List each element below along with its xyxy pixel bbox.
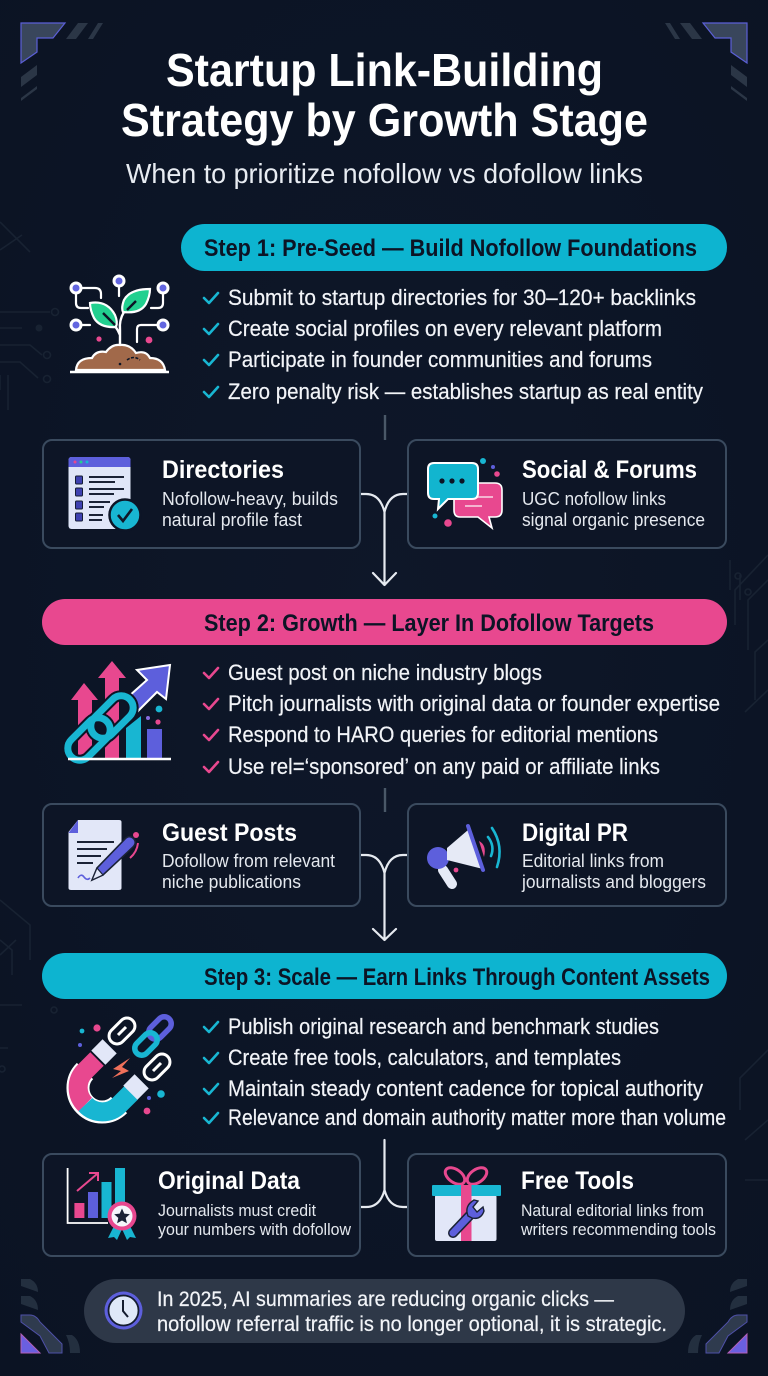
step 1 heading bar <box>181 224 727 271</box>
title: Strategy by Growth Stage <box>121 94 648 146</box>
step 1 checklist: Zero penalty risk — establishes startup as real entity <box>228 379 703 404</box>
card: social and forums <box>408 440 726 548</box>
step 2 checklist <box>204 660 720 779</box>
card: free tools: writers recommending tools <box>520 1220 716 1239</box>
card: original data: Original Data <box>158 1167 301 1195</box>
card: social and forums: signal organic presence <box>522 509 705 530</box>
corner ornament: top left <box>21 23 103 101</box>
icon: magnet attracting links <box>78 1014 174 1114</box>
card: guest posts <box>43 804 360 906</box>
subtitle: When to prioritize nofollow vs dofollow links <box>126 158 643 189</box>
step 3 heading bar <box>42 953 727 999</box>
card: original data <box>43 1154 360 1256</box>
step 1 heading bar: Step 1: Pre-Seed — Build Nofollow Foundations <box>204 235 697 262</box>
step 1 checklist: Submit to startup directories for 30–120+ backlinks <box>228 285 696 310</box>
card: guest posts: Guest Posts <box>162 819 297 847</box>
step 3 checklist <box>204 1014 726 1130</box>
panel: step 1 pre-seed <box>43 224 727 585</box>
corner ornament: top right <box>665 23 747 101</box>
step 2 checklist: Respond to HARO queries for editorial mentions <box>228 722 658 747</box>
icon: clock <box>104 1292 142 1330</box>
card: digital pr: Digital PR <box>522 819 628 847</box>
step 1 checklist: Participate in founder communities and forums <box>228 347 652 372</box>
title: Startup Link-Building <box>166 44 603 96</box>
icon: directory list <box>68 457 140 530</box>
step 3 checklist: Publish original research and benchmark studies <box>228 1014 659 1039</box>
card: digital pr <box>408 804 726 906</box>
icon: chain link and growth arrows <box>63 661 171 765</box>
card: directories: Nofollow-heavy, builds <box>162 488 338 509</box>
icon: megaphone <box>427 826 500 884</box>
step 1 checklist <box>204 285 703 404</box>
card: free tools: Natural editorial links from <box>521 1201 704 1220</box>
card: original data: your numbers with dofollow <box>158 1220 352 1239</box>
corner ornament: bottom left <box>21 1279 80 1353</box>
callout: 2025 ai summaries note: In 2025, AI summaries are reducing organic clicks — <box>157 1288 614 1311</box>
card: original data: Journalists must credit <box>158 1201 316 1220</box>
card: free tools <box>408 1154 726 1256</box>
title <box>121 44 648 146</box>
connector: step 2 cards to step 3 <box>361 788 408 940</box>
connector: step 3 fork to cards <box>361 1140 408 1207</box>
card: directories: Directories <box>162 456 284 484</box>
panel: step 3 scale <box>42 953 727 1256</box>
panel: step 2 growth <box>42 599 727 940</box>
card: social and forums: Social & Forums <box>522 456 697 484</box>
icon: bar chart with badge <box>68 1168 136 1240</box>
card: digital pr: journalists and bloggers <box>521 871 706 892</box>
card: social and forums: UGC nofollow links <box>522 488 666 509</box>
connector: step 1 cards to step 2 <box>361 415 408 585</box>
card: guest posts: niche publications <box>162 871 301 892</box>
card: directories <box>43 440 360 548</box>
step 2 checklist: Guest post on niche industry blogs <box>228 660 542 685</box>
step 2 heading bar: Step 2: Growth — Layer In Dofollow Targets <box>204 610 654 637</box>
icon: sprout with nodes <box>70 276 169 372</box>
step 1 checklist: Create social profiles on every relevant platform <box>228 316 662 341</box>
card: free tools: Free Tools <box>521 1167 634 1195</box>
icon: gift box with wrench <box>432 1164 501 1241</box>
callout: 2025 ai summaries note <box>84 1279 685 1343</box>
corner ornament: bottom right <box>688 1279 747 1353</box>
icon: chat bubbles <box>428 458 502 528</box>
card: guest posts: Dofollow from relevant <box>162 850 335 871</box>
step 2 heading bar <box>42 599 727 645</box>
card: directories: natural profile fast <box>162 509 302 530</box>
card: digital pr: Editorial links from <box>522 850 664 871</box>
step 3 checklist: Create free tools, calculators, and templates <box>228 1045 621 1070</box>
step 3 checklist: Maintain steady content cadence for topical authority <box>228 1076 703 1101</box>
icon: document and pen <box>68 820 139 890</box>
callout: 2025 ai summaries note: nofollow referral traffic is no longer optional, it is strategic. <box>157 1313 667 1336</box>
step 2 checklist: Use rel=‘sponsored’ on any paid or affiliate links <box>228 754 660 779</box>
step 2 checklist: Pitch journalists with original data or founder expertise <box>228 691 720 716</box>
